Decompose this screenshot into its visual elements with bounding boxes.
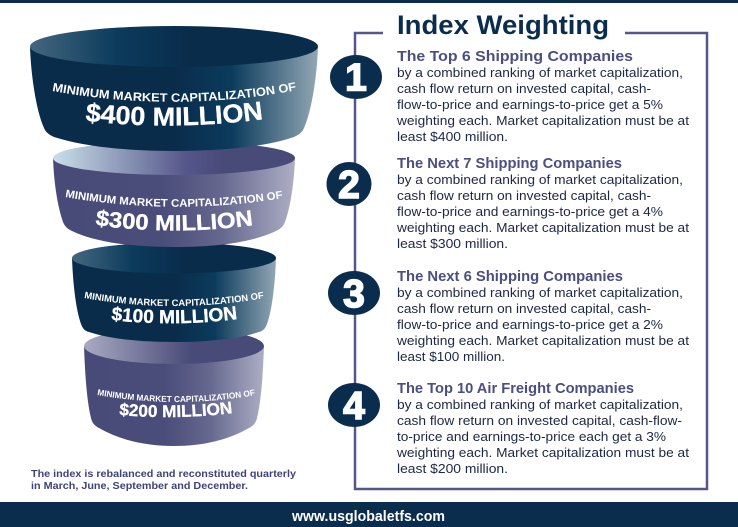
text block 2: flow-to-price and earnings-to-price get a 4%: [397, 205, 663, 219]
funnel tier: $300 million: MINIMUM MARKET CAPITALIZATION OF: [66, 190, 282, 207]
text block 3: The Next 6 Shipping Companies: [397, 268, 623, 285]
funnel tier: $300 million: $300 MILLION: [96, 209, 252, 231]
funnel tier: $100 million: [72, 244, 276, 342]
step 4: [328, 380, 690, 476]
number badge 1: 1: [345, 56, 367, 100]
text block 4: cash flow return on invested capital, cash-flow-: [397, 414, 682, 428]
footer bar: www.usglobaletfs.com: [291, 509, 445, 525]
text block 4: by a combined ranking of market capitalization,: [397, 398, 683, 412]
text block 2: cash flow return on invested capital, cash-: [397, 189, 651, 203]
text block 3: least $100 million.: [397, 350, 505, 364]
text block 2: least $300 million.: [397, 237, 508, 251]
text block 2: The Next 7 Shipping Companies: [397, 155, 622, 172]
funnel tier: $400 million: [30, 26, 318, 151]
number badge 2: [326, 162, 372, 207]
funnel tier: $100 million: $100 MILLION: [112, 306, 236, 324]
text block 1: The Top 6 Shipping Companies: [397, 48, 633, 65]
funnel tier: $400 million: MINIMUM MARKET CAPITALIZATION OF: [52, 82, 296, 102]
text block 2: [396, 155, 690, 251]
number badge 1: [330, 55, 382, 100]
step 1: [330, 48, 690, 144]
number badge 2: 2: [338, 164, 360, 207]
footnote: [31, 469, 296, 492]
text block 2: weighting each. Market capitalization must be at: [396, 221, 690, 235]
text block 3: [396, 268, 690, 364]
heading: Index Weighting: Index Weighting: [397, 10, 609, 40]
number badge 3: [328, 271, 380, 316]
text block 1: weighting each. Market capitalization must be at: [396, 114, 690, 128]
text block 1: least $400 million.: [397, 130, 508, 144]
text block 3: weighting each. Market capitalization must be at: [396, 334, 690, 348]
step 3: [328, 268, 690, 364]
number badge 3: 3: [343, 273, 365, 316]
text block 1: cash flow return on invested capital, cash-: [397, 82, 651, 96]
text block 4: weighting each. Market capitalization must be at: [396, 446, 690, 460]
funnel: [30, 26, 318, 446]
text block 4: [396, 380, 690, 476]
funnel tier: $200 million: MINIMUM MARKET CAPITALIZATION OF: [98, 389, 254, 402]
step 2: [326, 155, 690, 251]
text block 4: least $200 million.: [397, 462, 508, 476]
text block 1: by a combined ranking of market capitalization,: [397, 66, 683, 80]
text block 1: flow-to-price and earnings-to-price get a 5%: [397, 98, 663, 112]
funnel tier: $200 million: [84, 336, 264, 446]
text block 2: by a combined ranking of market capitalization,: [397, 173, 683, 187]
funnel tier: $200 million: $200 MILLION: [119, 402, 232, 418]
text block 4: The Top 10 Air Freight Companies: [397, 380, 634, 397]
text block 1: [396, 48, 690, 144]
funnel tier: $400 million: $400 MILLION: [86, 102, 262, 126]
number badge 4: 4: [343, 385, 365, 428]
footnote: The index is rebalanced and reconstituted quarterly: [31, 469, 296, 480]
funnel tier: $100 million: MINIMUM MARKET CAPITALIZATION OF: [84, 292, 264, 306]
text block 3: flow-to-price and earnings-to-price get a 2%: [397, 318, 663, 332]
footer bar: [0, 502, 738, 527]
funnel tier: $300 million: [53, 146, 295, 247]
number badge 4: [328, 383, 380, 428]
text block 4: to-price and earnings-to-price each get a 3%: [397, 430, 666, 444]
footnote: in March, June, September and December.: [31, 481, 248, 492]
text block 3: cash flow return on invested capital, cash-: [397, 302, 651, 316]
text block 3: by a combined ranking of market capitalization,: [397, 286, 683, 300]
panel frame: [355, 33, 707, 489]
top bar: [0, 0, 738, 3]
